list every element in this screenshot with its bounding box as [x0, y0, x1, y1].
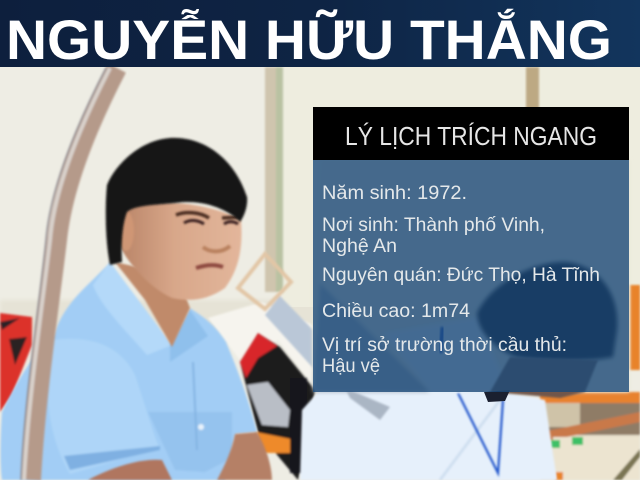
- birthplace: Nghệ An: [322, 236, 397, 257]
- birth year: Năm sinh: 1972.: [322, 183, 467, 204]
- collar dark: [484, 390, 510, 402]
- neck: [115, 262, 190, 347]
- post: right background: [526, 67, 539, 127]
- red bag: left: [0, 313, 32, 412]
- ear: [118, 211, 134, 251]
- forearm: left: [88, 460, 172, 480]
- shirt: [0, 262, 257, 480]
- face: [120, 202, 242, 300]
- shirt: [300, 370, 557, 480]
- facial features: [176, 213, 239, 268]
- birthplace: Nơi sinh: Thành phố Vinh,: [322, 215, 545, 236]
- white cloth: [208, 302, 313, 385]
- hair: [106, 138, 247, 265]
- home town: Nguyên quán: Đức Thọ, Hà Tĩnh: [322, 265, 600, 286]
- position: Vị trí sở trường thời cầu thủ:: [322, 335, 567, 356]
- sports bag: right: [240, 333, 315, 480]
- title banner: [0, 0, 640, 71]
- panel: profile: [313, 107, 629, 392]
- second person: background: [300, 160, 629, 480]
- curved pole: [21, 68, 117, 480]
- forearm: right: [217, 432, 272, 480]
- position: Hậu vệ: [322, 356, 380, 377]
- panel heading: [313, 107, 629, 160]
- portrait: main person: [0, 138, 272, 480]
- watermark: [238, 254, 313, 368]
- height: Chiều cao: 1m74: [322, 301, 470, 322]
- face of second person: [490, 357, 598, 398]
- watermark text lower: [345, 388, 390, 420]
- lanyard: [458, 393, 503, 473]
- title: NGUYỄN HỮU THẮNG: [6, 8, 612, 71]
- post: left background: [265, 67, 283, 292]
- hair of second person: [477, 262, 617, 361]
- shaded body under panel: [313, 160, 629, 392]
- panel heading: LÝ LỊCH TRÍCH NGANG: [345, 121, 597, 151]
- lower right ground: [540, 285, 640, 480]
